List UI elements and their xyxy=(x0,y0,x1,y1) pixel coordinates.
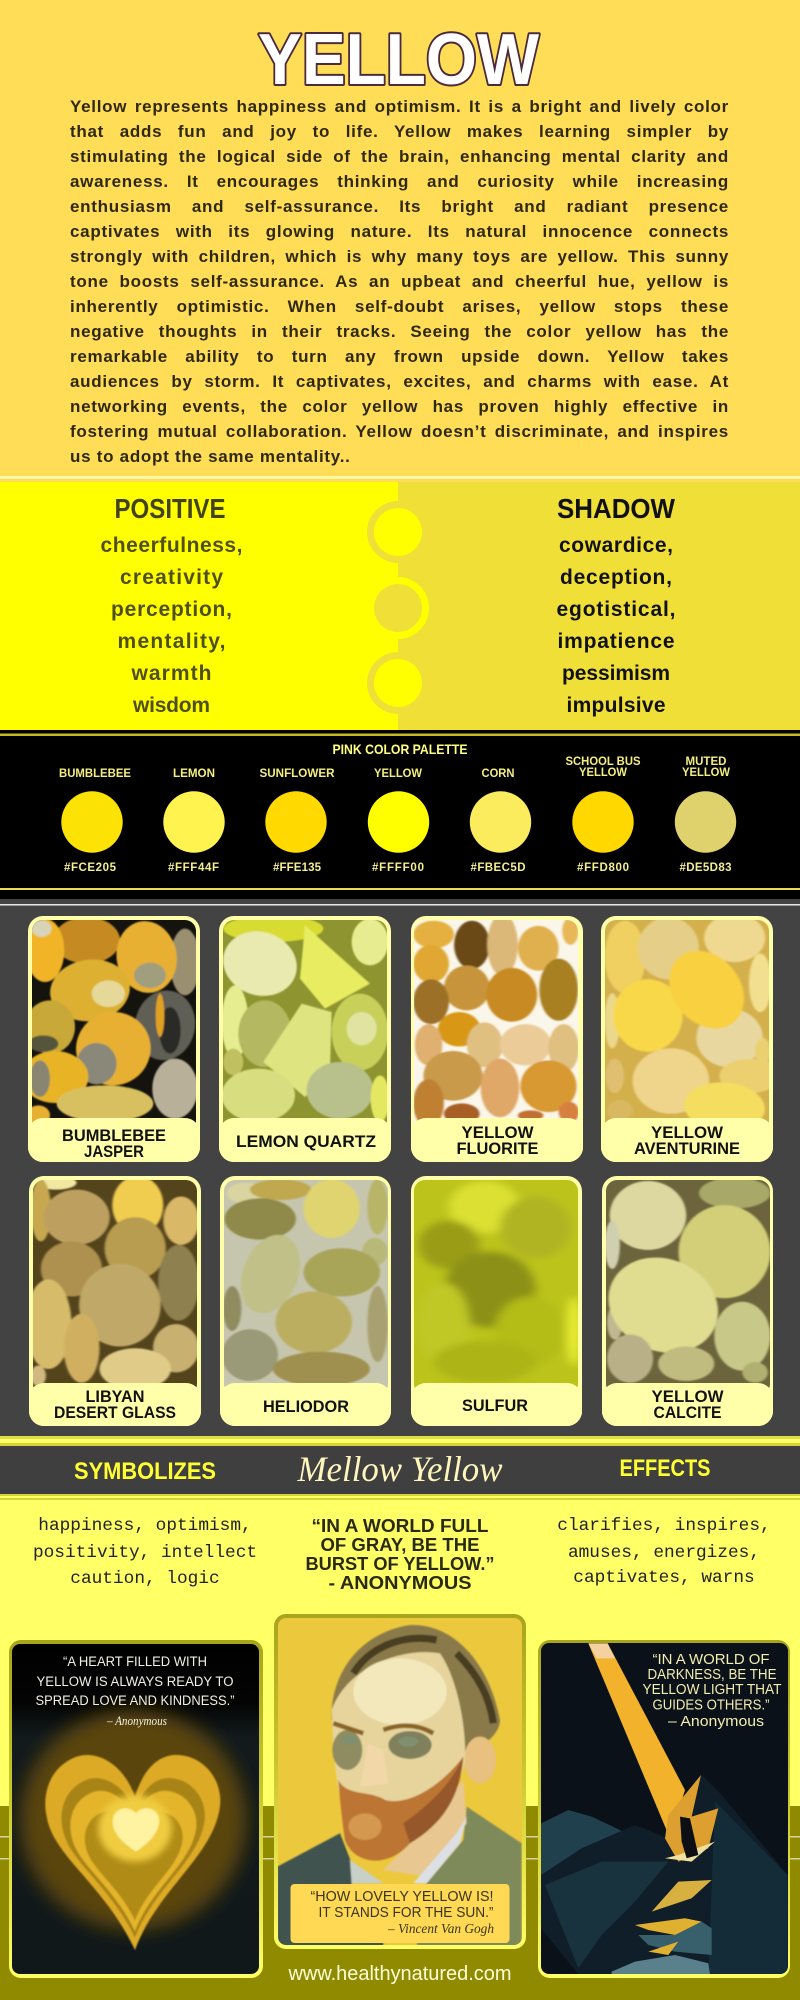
text block: introduction: captivates with its glowing nature. Its natural innocence connects xyxy=(70,222,729,241)
card: libyan desert glass xyxy=(26,1176,202,1426)
quote text: mountain poster xyxy=(642,1651,782,1730)
text block: introduction: Yellow represents happiness and optimism. It is a bright and lively color xyxy=(70,97,729,116)
text block: introduction: awareness. It encourages thinking and curiosity while increasing xyxy=(70,172,729,191)
palette labels: YELLOW xyxy=(682,767,730,779)
photo: bumblebee jasper xyxy=(32,920,196,1123)
caption: van gogh quote: “HOW LOVELY YELLOW IS! xyxy=(310,1888,494,1905)
palette labels: SCHOOL BUS xyxy=(566,756,641,768)
label: yellow calcite: CALCITE xyxy=(654,1404,722,1422)
list: effects: captivates, warns xyxy=(573,1568,755,1588)
label: yellow fluorite: FLUORITE xyxy=(456,1140,538,1158)
text block: introduction: fostering mutual collaboration. Yellow doesn’t discriminate, and inspires xyxy=(70,422,729,441)
palette swatches xyxy=(61,791,736,853)
list: positive traits xyxy=(100,534,242,717)
text block: introduction: networking events, the color yellow has proven highly effective in xyxy=(70,397,729,416)
panel: lower background xyxy=(0,1436,800,2000)
label: bumblebee jasper xyxy=(28,1118,200,1162)
panel: color palette xyxy=(0,730,800,900)
heading: palette: PINK COLOR PALETTE xyxy=(332,741,468,757)
photo: yellow aventurine xyxy=(605,920,769,1123)
label: bumblebee jasper: JASPER xyxy=(84,1143,144,1161)
heading: effects: EFFECTS xyxy=(620,1455,710,1482)
text block: introduction: negative thoughts in their tracks. Seeing the color yellow has the xyxy=(70,322,729,341)
list: shadow traits xyxy=(556,534,676,717)
heading: symbolizes: SYMBOLIZES xyxy=(74,1458,216,1485)
quote text: heart poster xyxy=(36,1654,234,1728)
panel: positive and shadow traits xyxy=(0,482,800,730)
heading: mellow yellow: Mellow Yellow xyxy=(297,1449,502,1489)
card: bumblebee jasper xyxy=(22,912,202,1162)
card: heliodor xyxy=(219,1176,391,1426)
footer: website: www.healthynatured.com xyxy=(288,1963,512,1985)
quote text: mountain poster: DARKNESS, BE THE xyxy=(648,1666,776,1683)
label: yellow calcite: YELLOW xyxy=(652,1388,724,1406)
palette labels: CORN xyxy=(482,768,514,780)
palette labels: YELLOW xyxy=(579,767,627,779)
list: symbolizes: happiness, optimism, xyxy=(38,1516,252,1536)
palette hex codes: #DE5D83 xyxy=(680,862,732,874)
heading: positive: POSITIVE xyxy=(114,493,226,524)
list: shadow traits: deception, xyxy=(560,566,672,589)
caption: van gogh quote xyxy=(290,1884,510,1943)
quote text: heart poster: SPREAD LOVE AND KINDNESS.” xyxy=(36,1693,234,1708)
list: symbolizes: caution, logic xyxy=(70,1569,220,1589)
quote text: mountain poster: “IN A WORLD OF xyxy=(652,1651,770,1668)
palette hex codes: #FFFF00 xyxy=(372,862,424,874)
list: positive traits: mentality, xyxy=(118,630,226,653)
label: yellow fluorite xyxy=(411,1118,583,1162)
list: shadow traits: egotistical, xyxy=(556,598,676,621)
card: sulfur xyxy=(411,1176,584,1426)
illustration: portrait xyxy=(278,1618,522,1945)
photo: heliodor xyxy=(219,1176,390,1393)
photo: libyan desert glass xyxy=(33,1180,197,1388)
label: sulfur xyxy=(411,1383,582,1426)
text block: introduction: us to adopt the same mentality.. xyxy=(70,447,351,466)
list: effects: clarifies, inspires, xyxy=(557,1516,771,1536)
list: positive traits: perception, xyxy=(111,598,232,621)
quote: center: “IN A WORLD FULL xyxy=(312,1515,488,1536)
text block: introduction xyxy=(70,97,729,466)
list: symbolizes xyxy=(33,1516,257,1589)
text block: introduction: audiences by storm. It captivates, excites, and charms with ease. At xyxy=(70,372,729,391)
card: yellow fluorite xyxy=(411,914,584,1162)
photo: sulfur xyxy=(411,1176,584,1393)
panel: gemstones xyxy=(0,899,800,1437)
text block: introduction: tone boosts self-assurance. As an upbeat and cheerful hue, yellow is xyxy=(70,272,729,291)
list: effects xyxy=(557,1516,771,1588)
quote text: mountain poster: GUIDES OTHERS.” xyxy=(652,1696,770,1714)
illustration: beam of light on mountain xyxy=(541,1643,788,1974)
palette labels: MUTED xyxy=(686,756,726,768)
palette labels: YELLOW xyxy=(374,768,422,780)
palette hex codes: #FBEC5D xyxy=(470,862,526,874)
palette hex codes: #FFE135 xyxy=(273,862,322,874)
label: yellow aventurine: YELLOW xyxy=(651,1124,723,1142)
list: positive traits: wisdom xyxy=(132,694,210,717)
label: yellow calcite xyxy=(602,1383,773,1426)
icon: linked circles xyxy=(367,501,429,714)
palette labels xyxy=(59,756,730,780)
quote text: heart poster: “A HEART FILLED WITH xyxy=(63,1654,207,1669)
list: effects: amuses, energizes, xyxy=(568,1543,760,1563)
photo: yellow fluorite xyxy=(411,914,584,1128)
list: symbolizes: positivity, intellect xyxy=(33,1543,257,1563)
text block: introduction: inherently optimistic. When self-doubt arises, yellow stops these xyxy=(70,297,729,316)
label: heliodor: HELIODOR xyxy=(263,1398,349,1416)
label: sulfur: SULFUR xyxy=(462,1397,528,1415)
text block: introduction: enthusiasm and self-assurance. Its bright and radiant presence xyxy=(70,197,729,216)
quote text: mountain poster: – Anonymous xyxy=(668,1714,764,1730)
label: yellow aventurine: AVENTURINE xyxy=(634,1140,740,1158)
palette hex codes xyxy=(64,862,732,874)
palette hex codes: #FFD800 xyxy=(577,862,629,874)
palette labels: SUNFLOWER xyxy=(260,768,335,780)
illustration: glowing heart xyxy=(20,1710,247,1950)
quote: center: OF GRAY, BE THE xyxy=(320,1534,480,1555)
caption: van gogh quote: – Vincent Van Gogh xyxy=(387,1922,494,1937)
label: heliodor xyxy=(220,1383,391,1426)
quote text: mountain poster: YELLOW LIGHT THAT xyxy=(642,1681,782,1698)
poster: van gogh xyxy=(270,1610,530,1955)
label: libyan desert glass: LIBYAN xyxy=(86,1388,144,1406)
label: lemon quartz xyxy=(219,1118,391,1162)
label: libyan desert glass: DESERT GLASS xyxy=(54,1404,176,1422)
heading: shadow: SHADOW xyxy=(557,493,676,524)
photo: yellow calcite xyxy=(606,1180,770,1388)
quote: center: - ANONYMOUS xyxy=(328,1572,472,1593)
palette hex codes: #FFF44F xyxy=(168,862,219,874)
list: shadow traits: pessimism xyxy=(562,662,670,685)
text block: introduction: remarkable ability to turn any frown upside down. Yellow takes xyxy=(70,347,729,366)
palette labels: BUMBLEBEE xyxy=(59,768,131,780)
card: yellow aventurine xyxy=(601,914,781,1162)
quote: center: BURST OF YELLOW.” xyxy=(306,1553,494,1574)
title: YELLOW xyxy=(258,20,539,100)
label: yellow fluorite: YELLOW xyxy=(462,1124,534,1142)
poster: mountain light xyxy=(538,1640,790,1978)
label: lemon quartz: LEMON QUARTZ xyxy=(236,1133,376,1151)
label: libyan desert glass xyxy=(29,1383,201,1426)
list: shadow traits: impatience xyxy=(558,630,674,653)
quote text: heart poster: YELLOW IS ALWAYS READY TO xyxy=(36,1674,234,1689)
palette labels: LEMON xyxy=(173,768,215,780)
card: yellow calcite xyxy=(594,1176,776,1426)
text block: introduction: stimulating the logical side of the brain, enhancing mental clarity and xyxy=(70,147,729,166)
text block: introduction: strongly with children, which is why many toys are yellow. This sunny xyxy=(70,247,729,266)
list: positive traits: cheerfulness, xyxy=(100,534,242,557)
palette hex codes: #FCE205 xyxy=(64,862,117,874)
quote: center xyxy=(306,1515,494,1593)
list: positive traits: warmth xyxy=(130,662,212,685)
list: positive traits: creativity xyxy=(120,566,223,589)
panel: intro background xyxy=(0,0,800,482)
quote text: heart poster: – Anonymous xyxy=(106,1713,167,1728)
label: yellow aventurine xyxy=(601,1118,773,1162)
photo: lemon quartz xyxy=(223,920,387,1123)
list: shadow traits: impulsive xyxy=(566,694,666,717)
list: shadow traits: cowardice, xyxy=(559,534,673,557)
card: lemon quartz xyxy=(215,912,395,1162)
text block: introduction: that adds fun and joy to life. Yellow makes learning simpler by xyxy=(70,122,729,141)
poster: heart xyxy=(9,1640,263,1978)
caption: van gogh quote: IT STANDS FOR THE SUN.” xyxy=(318,1904,494,1921)
label: bumblebee jasper: BUMBLEBEE xyxy=(62,1127,166,1145)
